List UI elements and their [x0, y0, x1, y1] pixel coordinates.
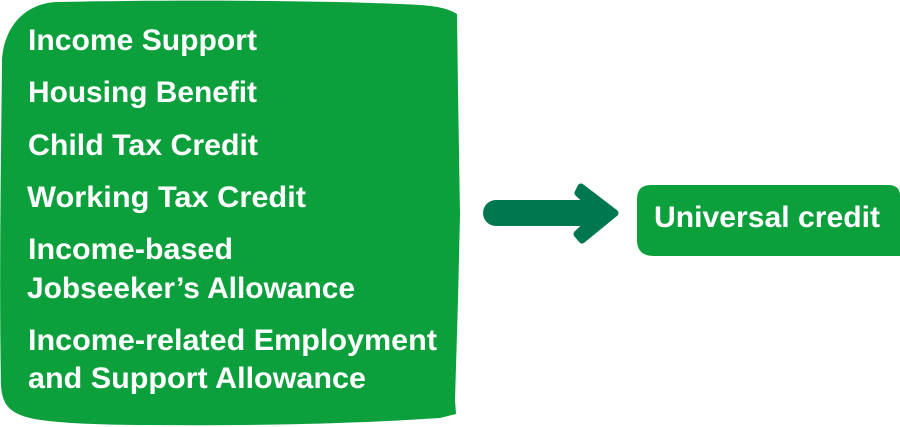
arrow shaft — [496, 200, 592, 226]
benefit: Working Tax Credit: Working Tax Credit — [27, 181, 306, 214]
benefit: Income-related Employment and Support Allowance: Income-related Employment — [28, 324, 437, 357]
benefit: Income-based Jobseeker's Allowance: Income-based — [28, 233, 233, 266]
panel background — [0, 1, 460, 425]
benefit: Child Tax Credit: Child Tax Credit — [28, 129, 258, 162]
label: Universal credit: Universal credit — [654, 201, 880, 234]
benefit: Income Support: Income Support — [28, 24, 257, 57]
panel: list of existing benefits — [0, 1, 460, 425]
box background — [637, 185, 900, 256]
panel: Universal credit — [637, 185, 900, 256]
benefit: Income-related Employment and Support Allowance — [28, 324, 437, 395]
arrow: to Universal credit — [496, 187, 615, 240]
benefit: Income-based Jobseeker's Allowance: Jobseeker’s Allowance — [27, 272, 355, 305]
arrow head — [577, 187, 615, 240]
benefit: Income-related Employment and Support Allowance: and Support Allowance — [28, 362, 366, 395]
benefit: Housing Benefit: Housing Benefit — [28, 76, 257, 109]
benefit: Income-based Jobseeker's Allowance — [27, 233, 355, 305]
